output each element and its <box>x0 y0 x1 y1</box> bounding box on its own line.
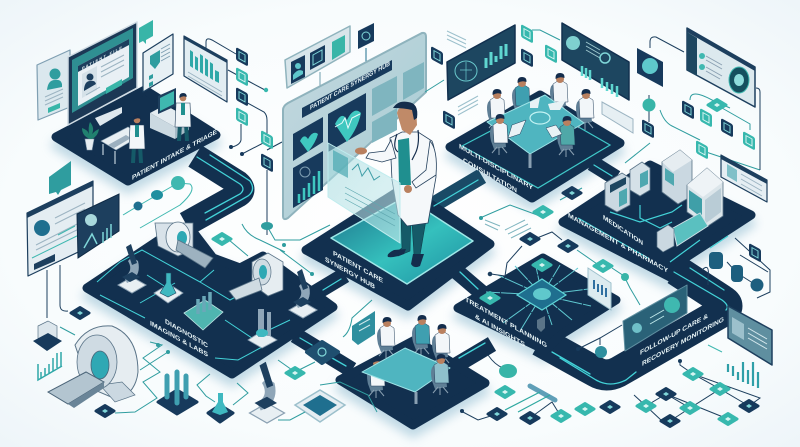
panel: left patient windows <box>27 161 119 276</box>
label: hub platform: SYNERGY HUB <box>325 256 375 291</box>
road glow lines <box>197 155 727 384</box>
chart window <box>184 36 227 102</box>
label: follow-up: RECOVERY MONITORING <box>642 316 724 368</box>
recovery network <box>634 345 760 426</box>
connectors near treatment <box>488 232 640 305</box>
label: hub platform <box>325 250 383 291</box>
heart tile <box>293 117 323 161</box>
bars tile <box>293 151 323 208</box>
top MRI scanner <box>155 222 213 268</box>
consultation side icons <box>431 24 557 130</box>
mini chart <box>38 352 62 380</box>
chart card <box>588 268 611 310</box>
treatment icons <box>505 220 629 281</box>
hair <box>393 102 417 120</box>
panel: meeting platform <box>343 300 450 404</box>
teal chip tiles <box>481 292 499 304</box>
brain tile <box>637 48 663 87</box>
wearables cluster <box>702 238 770 298</box>
side tiles <box>372 62 424 143</box>
lock shield <box>537 316 545 332</box>
circuit traces <box>486 262 596 331</box>
consult floor outline <box>462 105 610 188</box>
shoes <box>388 249 424 267</box>
staff member at counter <box>175 93 191 141</box>
scrubs <box>398 138 411 185</box>
hole icons between hub and pharmacy <box>479 188 582 230</box>
head <box>397 106 417 135</box>
patient record window <box>27 181 93 276</box>
panel: patient intake and triage <box>37 20 227 182</box>
label: treatment: TREATMENT PLANNING <box>465 296 548 350</box>
dark vitals panel <box>77 194 119 258</box>
panel: patient care synergy hub <box>283 33 473 284</box>
flask <box>208 393 233 422</box>
label: consultation: MULTI-DISCIPLINARY <box>459 143 533 192</box>
staff member at desk <box>129 115 145 163</box>
tablet <box>295 390 345 422</box>
speech tile <box>343 300 375 345</box>
platforms <box>56 90 751 425</box>
consultation connectors <box>425 30 760 170</box>
small cards by pharmacy <box>721 155 767 202</box>
monitor <box>68 22 137 126</box>
reports dark panel <box>562 23 629 100</box>
conference table <box>487 95 584 168</box>
large microscope <box>250 362 284 423</box>
large MRI scanner <box>48 326 138 408</box>
node below monitor <box>576 325 622 358</box>
monitoring tablet <box>728 306 772 365</box>
hub connectors lower-left <box>213 222 330 276</box>
column analyzer <box>248 309 277 348</box>
right MRI scanner <box>229 253 283 300</box>
patient id card <box>37 50 70 120</box>
panel: medication management and pharmacy <box>568 150 728 275</box>
stethoscope <box>395 130 418 160</box>
hand <box>355 148 367 154</box>
glass dashboard: PATIENT CARE SYNERGY HUB <box>310 61 390 112</box>
diamond node <box>286 368 304 378</box>
shield card <box>143 34 173 92</box>
panel: glass icon board <box>285 23 374 90</box>
left lab items <box>33 265 170 416</box>
speech note <box>602 102 633 133</box>
test tube rack <box>158 372 197 414</box>
reception counter <box>150 88 189 139</box>
lab circuit lines <box>97 250 290 360</box>
label: diagnostic: IMAGING & LABS <box>150 320 208 359</box>
follow-up monitor pair <box>623 285 687 351</box>
flask station <box>154 273 183 303</box>
lower connectors <box>197 360 377 420</box>
pharmacy circuits <box>578 205 728 262</box>
pharmacy cabinets <box>662 150 723 226</box>
label: hub platform: PATIENT CARE <box>333 250 383 285</box>
label: consultation: CONSULTATION <box>463 157 517 195</box>
intake icon tiles <box>229 47 273 173</box>
label: pharmacy: MEDICATION <box>603 214 643 247</box>
right arm <box>412 141 436 188</box>
microscope right <box>289 269 317 318</box>
kiosk machines <box>605 162 650 212</box>
label: diagnostic: DIAGNOSTIC <box>165 318 208 350</box>
bottom pipeline tiles <box>460 355 619 424</box>
road junction node <box>307 342 338 363</box>
desk <box>101 127 142 164</box>
speech icon <box>49 161 71 195</box>
node chain under intake <box>123 176 192 228</box>
hub glowing plate <box>331 197 473 284</box>
label: pharmacy: MANAGEMENT & PHARMACY <box>568 212 668 275</box>
coat <box>390 132 436 226</box>
brain analytics panel <box>447 25 515 100</box>
conveyor <box>657 213 708 252</box>
platform shadows <box>56 98 751 433</box>
meeting table <box>362 348 450 404</box>
glass dashboard <box>283 33 426 219</box>
holographic screen <box>328 143 400 243</box>
panel: treatment planning and AI insights <box>465 260 611 350</box>
AI chip <box>517 279 566 310</box>
message bubble <box>139 20 153 44</box>
label: patient intake: PATIENT INTAKE & TRIAGE <box>132 128 217 182</box>
connecting roads between platforms <box>186 156 727 375</box>
test tubes station <box>184 292 223 330</box>
consult seated back row <box>487 73 594 130</box>
consult seated front row <box>490 114 575 157</box>
small analyzer <box>33 321 62 351</box>
large heart tile <box>328 93 366 152</box>
plant <box>82 122 99 150</box>
label: treatment: & AI INSIGHTS <box>475 313 525 349</box>
panel: diagnostic imaging and labs <box>97 222 317 360</box>
care loop tiles <box>642 98 755 160</box>
hub doctor <box>328 102 436 267</box>
label: follow-up: FOLLOW-UP CARE & <box>640 313 708 357</box>
microscope left <box>118 244 146 293</box>
front seated staff <box>431 354 449 395</box>
meeting seated staff <box>367 315 450 398</box>
profile window <box>687 28 755 107</box>
pointing arm <box>366 140 396 162</box>
panel: multi-disciplinary consultation <box>459 73 610 195</box>
legs <box>395 215 426 256</box>
connectors: intake icons <box>206 39 282 235</box>
monitor: PATIENT FILE <box>82 45 122 71</box>
